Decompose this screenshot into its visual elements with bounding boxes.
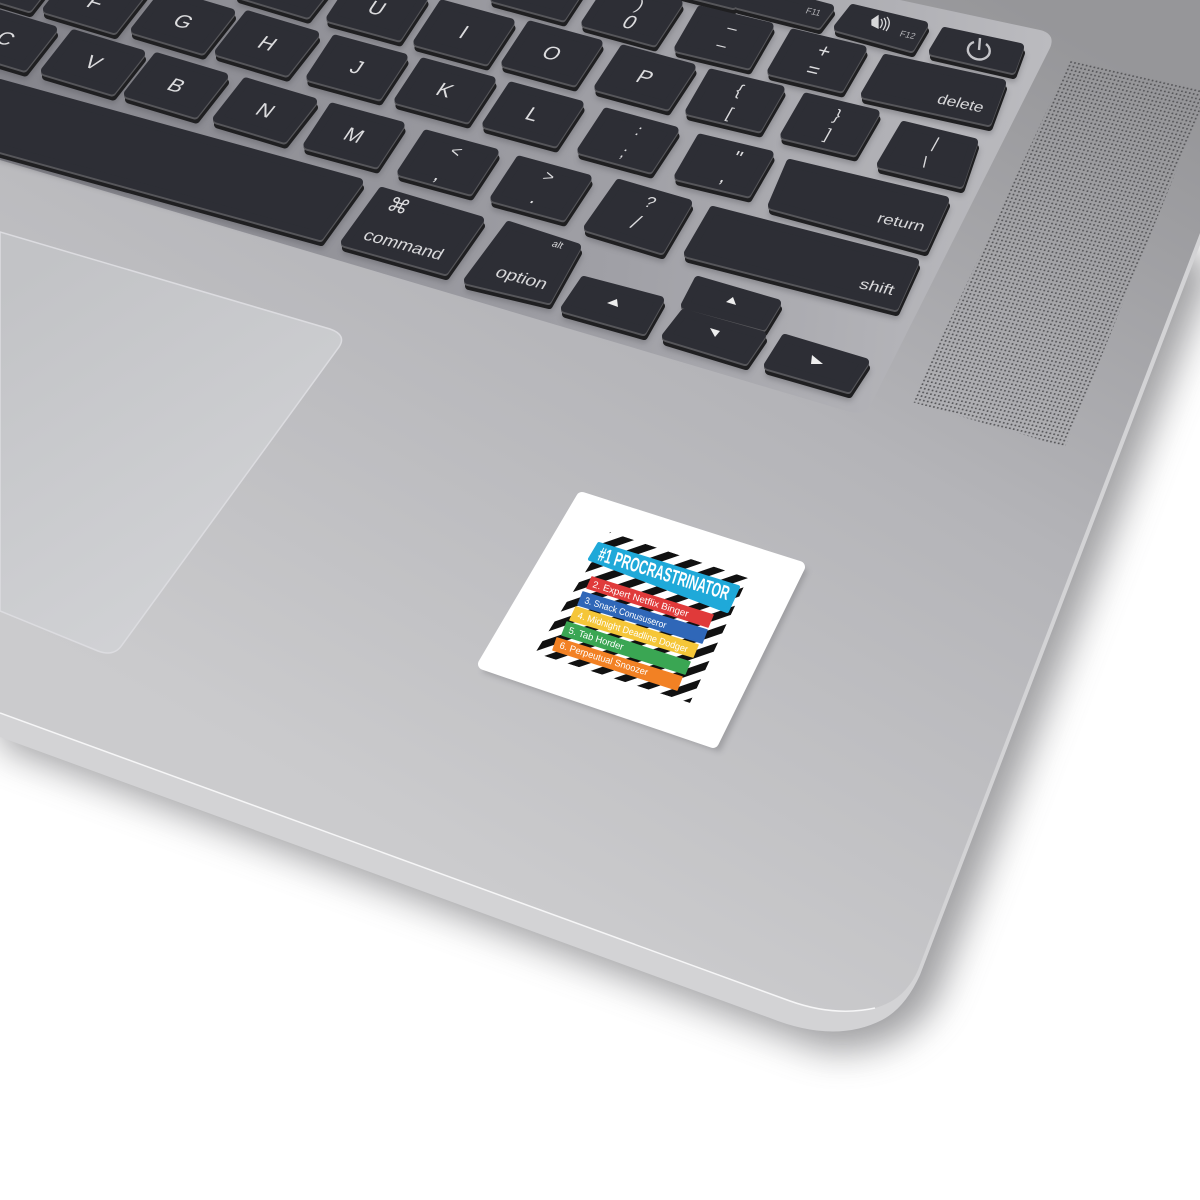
symbol key labels: /	[626, 212, 645, 233]
list bar 6: 6. Perpeutual Snoozer	[558, 640, 649, 678]
symbol key labels: <	[446, 142, 466, 161]
icon: power	[968, 38, 990, 59]
arrow key glyphs	[607, 297, 823, 364]
letter key labels: I	[454, 22, 473, 43]
symbol key labels: ,	[429, 164, 448, 185]
symbol key labels: –	[712, 36, 731, 55]
word key labels: F12	[898, 29, 917, 41]
symbol key labels: –	[723, 19, 742, 38]
symbol key labels: :	[632, 122, 647, 139]
letter key labels	[0, 0, 658, 147]
letter key labels: V	[79, 52, 107, 74]
word key labels	[360, 6, 986, 299]
word key labels: ⌘	[382, 194, 414, 219]
title bar: #1 PROCRASTRINATOR	[595, 544, 732, 605]
letter key labels: H	[253, 33, 281, 55]
sticker: #1 procrastrinator	[484, 498, 799, 742]
keyboard well	[0, 0, 1052, 413]
word key labels: return	[874, 211, 927, 235]
symbol key labels: "	[728, 148, 746, 169]
letter key labels: J	[345, 57, 368, 79]
symbol key labels: [	[723, 104, 737, 122]
list bar 6	[553, 638, 682, 690]
letter key labels: M	[339, 124, 368, 147]
symbol key labels: \	[918, 153, 932, 171]
sticker shadow	[482, 497, 808, 752]
symbol key labels: ;	[617, 144, 632, 161]
word key labels: option	[492, 263, 551, 293]
symbol key labels: ,	[716, 166, 733, 187]
word key labels: delete	[934, 92, 986, 116]
symbol key labels: .	[525, 187, 544, 208]
list bar 2: 2. Expert Netflix Binger	[591, 579, 690, 620]
symbol key labels: ]	[821, 125, 835, 143]
list bar 3: 3. Snack Conususeror	[583, 595, 668, 631]
symbol key labels: |	[929, 134, 942, 152]
symbol key labels	[429, 0, 942, 233]
icon: volume	[872, 16, 889, 31]
letter key labels: P	[632, 66, 658, 89]
letter key labels: L	[521, 104, 545, 126]
letter key labels: G	[168, 11, 198, 33]
symbol key labels: }	[830, 106, 845, 124]
speaker grille	[912, 60, 1200, 447]
word key labels: command	[360, 226, 447, 263]
symbol key labels: ?	[640, 193, 660, 212]
title bar	[590, 544, 738, 611]
letter key labels: K	[432, 79, 458, 102]
word key labels: F11	[804, 6, 823, 18]
letter key labels: N	[251, 100, 279, 122]
laptop cast shadow	[0, 240, 1200, 1050]
keyboard keys	[0, 0, 1021, 397]
symbol key labels: 0	[618, 12, 642, 34]
list bar 5: 5. Tab Horder	[567, 625, 625, 653]
list bar 5	[562, 622, 690, 674]
sticker backing	[484, 498, 799, 742]
symbol key labels: =	[802, 59, 825, 82]
deck highlight edge	[0, 713, 875, 1011]
hazard stripes	[535, 532, 748, 703]
letter key labels: O	[537, 42, 566, 65]
list bar 3	[578, 592, 707, 643]
symbol key labels: +	[813, 40, 836, 63]
list bar 2	[587, 577, 713, 627]
letter key labels: B	[162, 75, 190, 97]
trackpad	[0, 232, 342, 653]
symbol key labels: >	[539, 167, 559, 186]
word key labels: alt	[549, 239, 565, 251]
list bar 4: 4. Midnight Deadline Dodger	[576, 610, 689, 655]
word key labels: shift	[856, 277, 897, 299]
symbol key labels: {	[732, 81, 747, 99]
